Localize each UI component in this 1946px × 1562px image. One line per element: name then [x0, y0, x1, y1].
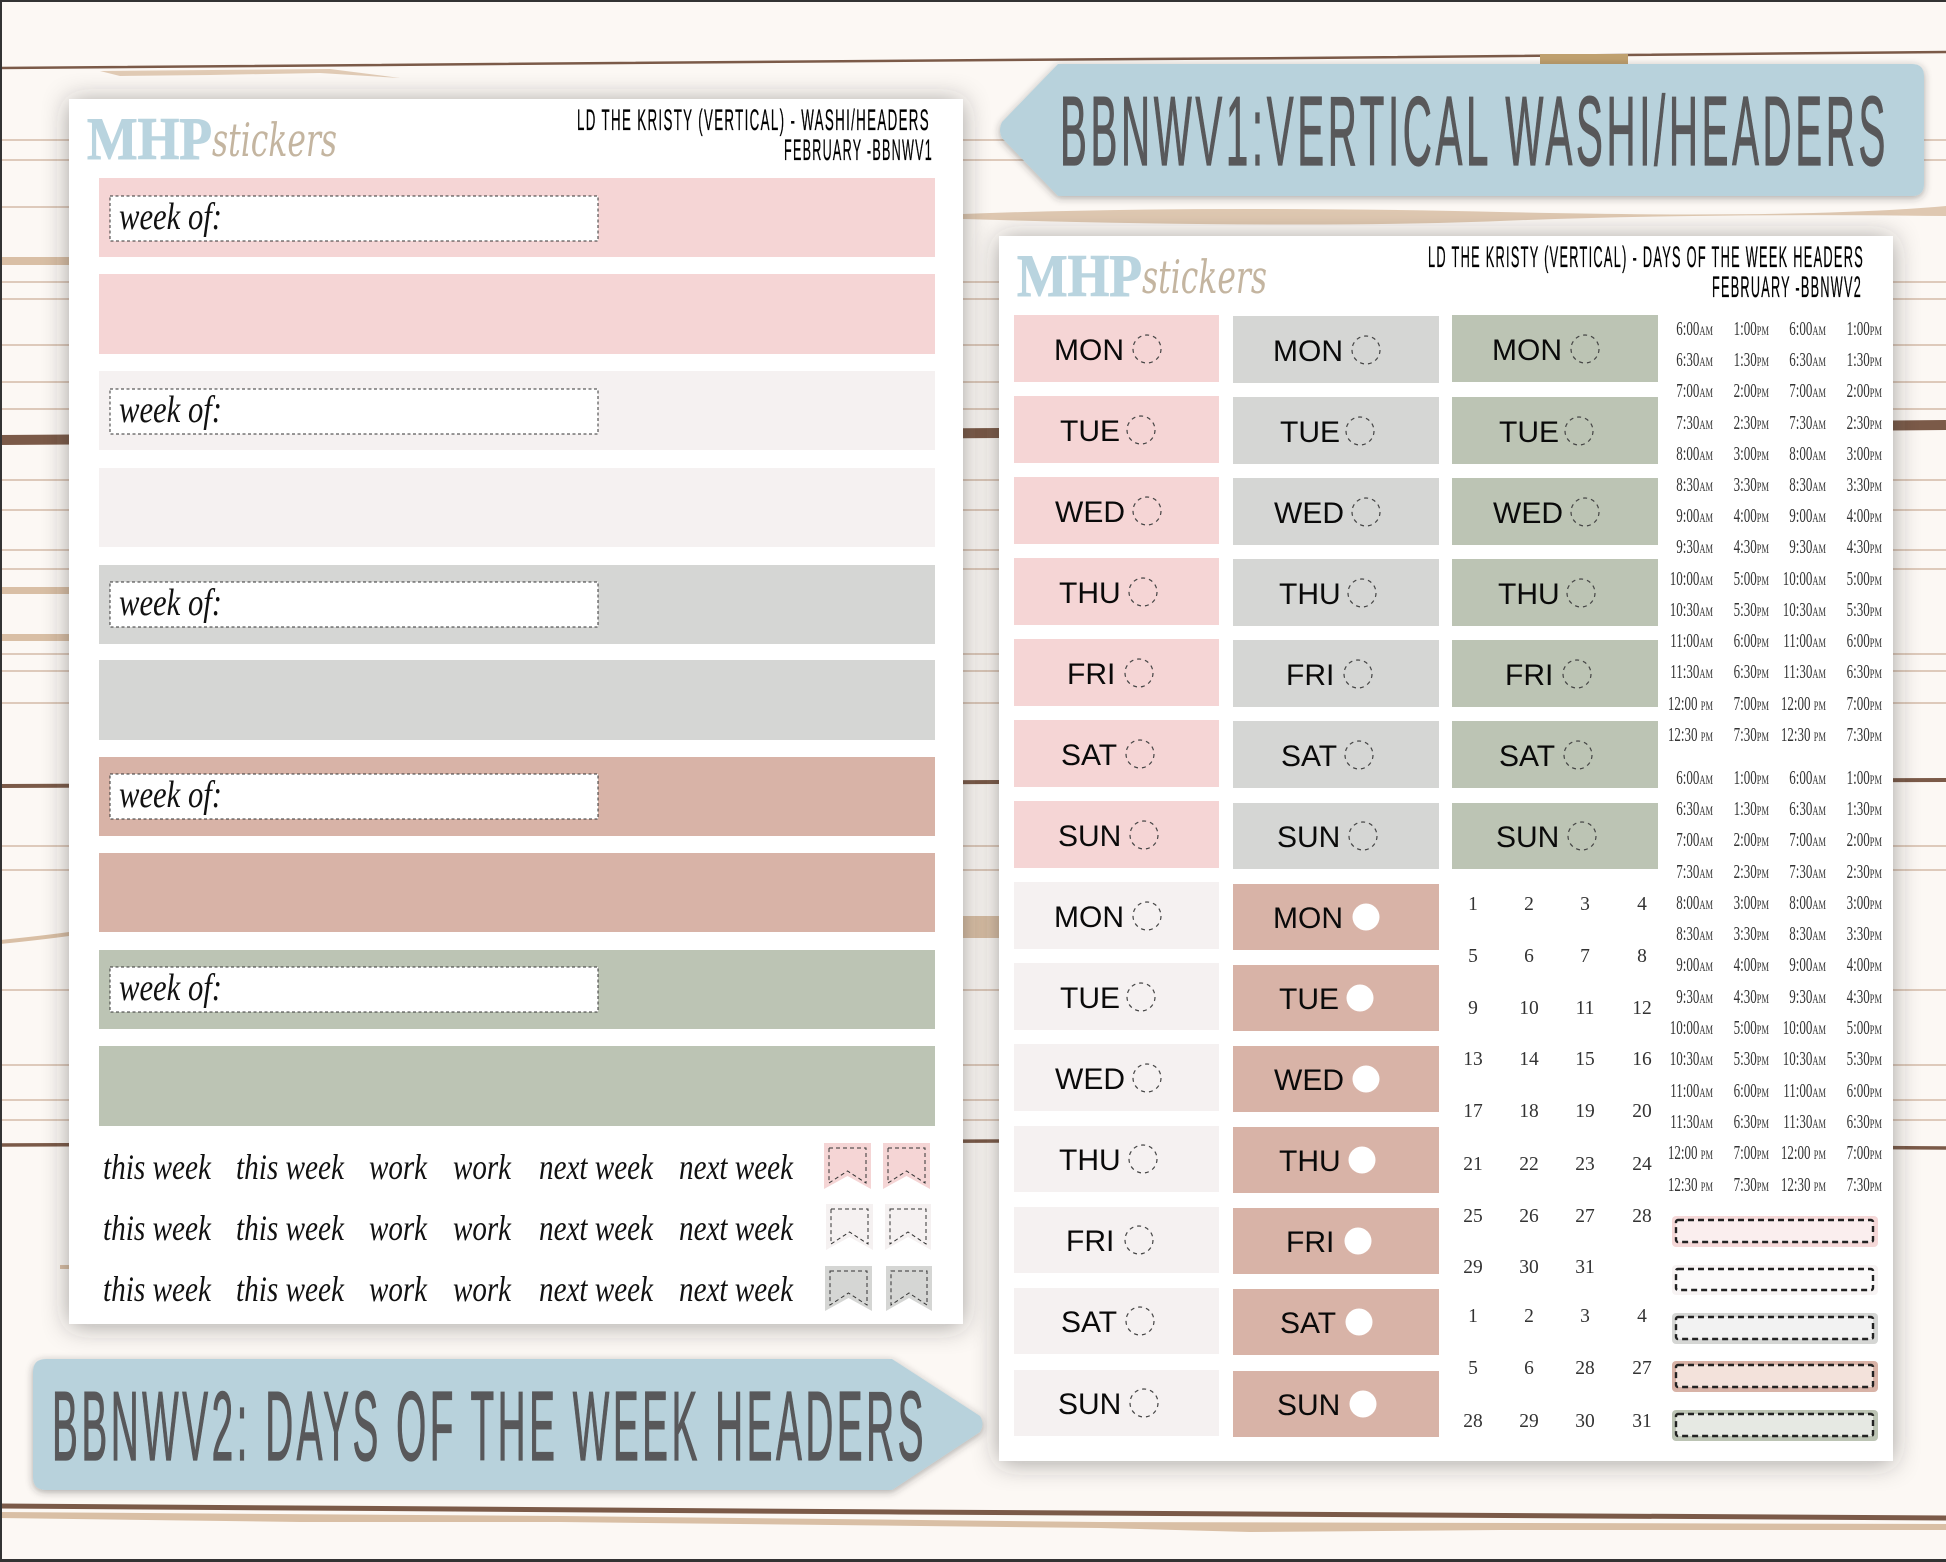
date number stickers: 1: [1468, 1306, 1478, 1327]
script words row 3: this week: [103, 1269, 212, 1309]
logo: [1017, 243, 1267, 309]
time stickers: upper block: 7:30PM: [1734, 723, 1769, 746]
time stickers: upper block: 1:30PM: [1847, 348, 1882, 371]
time stickers: upper block: 7:30PM: [1847, 723, 1882, 746]
time stickers: lower block: 7:30PM: [1847, 1173, 1882, 1196]
time stickers: lower block: 2:00PM: [1847, 828, 1882, 851]
time stickers: upper block: 6:30PM: [1847, 660, 1882, 683]
time stickers: lower block: 12:00 PM: [1668, 1141, 1713, 1164]
time stickers: upper block: 3:00PM: [1734, 442, 1769, 465]
script words row 2: [103, 1208, 794, 1248]
date number stickers: 17: [1463, 1101, 1483, 1122]
time stickers: upper block: 2:00PM: [1847, 379, 1882, 402]
column: blush day headers: WED: [1055, 1063, 1125, 1096]
time stickers: upper block: 9:30AM: [1676, 535, 1713, 558]
time stickers: lower block: 6:30PM: [1734, 1110, 1769, 1133]
date number stickers: 2: [1524, 894, 1534, 915]
strip: grey: [99, 660, 935, 740]
script words row 3: work: [453, 1269, 512, 1309]
logo: stickers: [212, 113, 337, 167]
column: blush day headers: TUE: [1060, 982, 1120, 1015]
time stickers: lower block: 10:00AM: [1670, 1016, 1713, 1039]
infographic canvas: LD THE KRISTY (VERTICAL) - WASHI/HEADERS: [577, 104, 930, 137]
time stickers: upper block: 9:00AM: [1789, 504, 1826, 527]
time stickers: lower block: 3:30PM: [1847, 922, 1882, 945]
time stickers: upper block: 3:30PM: [1847, 473, 1882, 496]
date number stickers: 1: [1468, 894, 1478, 915]
time stickers: upper block: 7:30AM: [1789, 411, 1826, 434]
time stickers: lower block: 7:30AM: [1676, 860, 1713, 883]
time stickers: lower block: 9:30AM: [1789, 985, 1826, 1008]
time stickers: lower block: 10:30AM: [1670, 1047, 1713, 1070]
script words row 1: work: [453, 1147, 512, 1187]
time stickers: upper block: 12:00 PM: [1668, 692, 1713, 715]
script words row 1: this week: [236, 1147, 345, 1187]
time stickers: upper block: 9:30AM: [1789, 535, 1826, 558]
dashed label strip: sage: [1672, 1410, 1878, 1441]
script words row 1: next week: [679, 1147, 794, 1187]
time stickers: lower block: 9:00AM: [1789, 953, 1826, 976]
time stickers: upper block: 11:00AM: [1670, 629, 1713, 652]
time stickers: upper block: 3:30PM: [1734, 473, 1769, 496]
column: grey day headers: TUE: [1280, 416, 1340, 449]
time stickers: lower block: 2:30PM: [1734, 860, 1769, 883]
time stickers: lower block: 2:00PM: [1734, 828, 1769, 851]
time stickers: lower block: 7:30PM: [1734, 1173, 1769, 1196]
column: blush day headers: [1014, 882, 1219, 1436]
time stickers: lower block: 3:30PM: [1734, 922, 1769, 945]
column: pink day headers: SUN: [1058, 820, 1121, 853]
script words row 1: work: [369, 1147, 428, 1187]
time stickers: upper block: 7:00PM: [1734, 692, 1769, 715]
strip: rose with week of label: week of:: [119, 774, 222, 816]
column: grey day headers: THU: [1279, 578, 1341, 611]
time stickers: lower block: 1:30PM: [1734, 797, 1769, 820]
strip: grey with week of label: [99, 565, 935, 644]
date number stickers: 3: [1580, 894, 1590, 915]
time stickers: lower block: 11:30AM: [1670, 1110, 1713, 1133]
date number stickers: 24: [1632, 1154, 1652, 1175]
time stickers: upper block: 2:00PM: [1734, 379, 1769, 402]
time stickers: lower block: 4:00PM: [1847, 953, 1882, 976]
icon: grey flag stickers: [825, 1266, 932, 1311]
date number stickers: 18: [1519, 1101, 1539, 1122]
dashed label strip: pink: [1672, 1216, 1878, 1247]
date number stickers: 12: [1632, 998, 1652, 1019]
date number stickers: 9: [1468, 998, 1478, 1019]
column: sage day headers: FRI: [1505, 659, 1553, 692]
column: blush day headers: SUN: [1058, 1388, 1121, 1421]
time stickers: lower block: 12:30 PM: [1668, 1173, 1713, 1196]
column: grey day headers: MON: [1273, 335, 1343, 368]
time stickers: upper block: 8:30AM: [1789, 473, 1826, 496]
column: grey day headers: WED: [1274, 497, 1344, 530]
time stickers: upper block: 7:00AM: [1676, 379, 1713, 402]
date number stickers: 4: [1637, 894, 1647, 915]
time stickers: lower block: 6:00AM: [1676, 766, 1713, 789]
time stickers: upper block: 8:30AM: [1676, 473, 1713, 496]
column: pink day headers: TUE: [1060, 415, 1120, 448]
time stickers: lower block: 5:30PM: [1734, 1047, 1769, 1070]
time stickers: upper block: 2:30PM: [1734, 411, 1769, 434]
column: rose day headers: TUE: [1279, 983, 1339, 1016]
time stickers: lower block: 3:00PM: [1734, 891, 1769, 914]
date number stickers: 25: [1463, 1206, 1483, 1227]
banner: BBNWV2 days of the week headers: [33, 1359, 982, 1490]
date number stickers: 21: [1463, 1154, 1483, 1175]
column: rose day headers: SAT: [1280, 1307, 1336, 1340]
time stickers: lower block: 1:00PM: [1847, 766, 1882, 789]
date number stickers: 8: [1637, 946, 1647, 967]
script words row 3: [103, 1269, 794, 1309]
date number stickers: 26: [1519, 1206, 1539, 1227]
strip: rose with week of label: [99, 757, 935, 836]
time stickers: upper block: 7:00AM: [1789, 379, 1826, 402]
time stickers: lower block: 5:00PM: [1734, 1016, 1769, 1039]
time stickers: upper block: 6:00AM: [1789, 317, 1826, 340]
strip: sage with week of label: week of:: [119, 967, 222, 1009]
panel: washi / headers sticker sheet: [69, 99, 963, 1324]
dashed label strip: rose: [1672, 1361, 1878, 1392]
time stickers: lower block: 6:30AM: [1789, 797, 1826, 820]
script words row 3: next week: [679, 1269, 794, 1309]
date number stickers: 15: [1575, 1049, 1595, 1070]
time stickers: lower block: 7:00AM: [1676, 828, 1713, 851]
date number stickers: 5: [1468, 1358, 1478, 1379]
time stickers: lower block: 10:30AM: [1783, 1047, 1826, 1070]
time stickers: upper block: 12:30 PM: [1781, 723, 1826, 746]
time stickers: lower block: 11:30AM: [1783, 1110, 1826, 1133]
column: pink day headers: MON: [1054, 334, 1124, 367]
column: grey day headers: SUN: [1277, 821, 1340, 854]
date number stickers: 6: [1524, 1358, 1534, 1379]
script words row 1: this week: [103, 1147, 212, 1187]
date number stickers: 22: [1519, 1154, 1539, 1175]
strip: pink: [99, 274, 935, 354]
script words row 2: this week: [236, 1208, 345, 1248]
date number stickers: 28: [1463, 1411, 1483, 1432]
script words row 3: next week: [539, 1269, 654, 1309]
script words row 3: this week: [236, 1269, 345, 1309]
time stickers: lower block: 8:30AM: [1676, 922, 1713, 945]
time stickers: lower block: 4:00PM: [1734, 953, 1769, 976]
strip: pink with week of label: [99, 178, 935, 257]
column: grey day headers: [1233, 316, 1439, 869]
banner: BBNWV1 vertical washi/headers: [1000, 64, 1924, 196]
time stickers: upper block: 12:30 PM: [1668, 723, 1713, 746]
strip: blush: [99, 468, 935, 547]
time stickers: upper block: 10:00AM: [1783, 567, 1826, 590]
script words row 2: next week: [539, 1208, 654, 1248]
date number stickers: 14: [1519, 1049, 1539, 1070]
date number stickers: 16: [1632, 1049, 1652, 1070]
sheet title: [1428, 241, 1864, 304]
column: pink day headers: WED: [1055, 496, 1125, 529]
column: grey day headers: SAT: [1281, 740, 1337, 773]
time stickers: lower block: 4:30PM: [1847, 985, 1882, 1008]
date number stickers: 30: [1575, 1411, 1595, 1432]
date number stickers: 27: [1632, 1358, 1652, 1379]
time stickers: upper block: 9:00AM: [1676, 504, 1713, 527]
strip: rose: [99, 853, 935, 932]
time stickers: upper block: 1:00PM: [1734, 317, 1769, 340]
date number stickers: 3: [1580, 1306, 1590, 1327]
date number stickers: 29: [1519, 1411, 1539, 1432]
time stickers: lower block: 4:30PM: [1734, 985, 1769, 1008]
logo: MHP: [1017, 243, 1142, 309]
date number stickers: 27: [1575, 1206, 1595, 1227]
date number stickers: 5: [1468, 946, 1478, 967]
time stickers: upper block: 7:30AM: [1676, 411, 1713, 434]
script words row 2: work: [453, 1208, 512, 1248]
time stickers: lower block: 6:00PM: [1847, 1079, 1882, 1102]
time stickers: lower block: 1:30PM: [1847, 797, 1882, 820]
time stickers: upper block: 7:00PM: [1847, 692, 1882, 715]
script words row 3: work: [369, 1269, 428, 1309]
strip: sage with week of label: [99, 950, 935, 1029]
time stickers: upper block: [1668, 317, 1882, 746]
time stickers: lower block: 1:00PM: [1734, 766, 1769, 789]
logo: MHP: [87, 106, 212, 172]
date number stickers: 23: [1575, 1154, 1595, 1175]
time stickers: lower block: 11:00AM: [1783, 1079, 1826, 1102]
date number stickers: 31: [1575, 1257, 1595, 1278]
strip: grey with week of label: week of:: [119, 582, 222, 624]
time stickers: upper block: 6:00AM: [1676, 317, 1713, 340]
time stickers: lower block: 5:00PM: [1847, 1016, 1882, 1039]
column: sage day headers: MON: [1492, 334, 1562, 367]
column: sage day headers: TUE: [1499, 416, 1559, 449]
time stickers: upper block: 12:00 PM: [1781, 692, 1826, 715]
time stickers: lower block: 11:00AM: [1670, 1079, 1713, 1102]
time stickers: lower block: 6:00AM: [1789, 766, 1826, 789]
time stickers: upper block: 11:30AM: [1783, 660, 1826, 683]
time stickers: upper block: 5:00PM: [1847, 567, 1882, 590]
time stickers: upper block: 6:30PM: [1734, 660, 1769, 683]
time stickers: lower block: 9:00AM: [1676, 953, 1713, 976]
column: rose day headers: [1233, 884, 1439, 1437]
time stickers: upper block: 5:30PM: [1734, 598, 1769, 621]
date number stickers: 2: [1524, 1306, 1534, 1327]
column: sage day headers: WED: [1493, 497, 1563, 530]
date number stickers: 6: [1524, 946, 1534, 967]
date number stickers: 10: [1519, 998, 1539, 1019]
time stickers: lower block: 9:30AM: [1676, 985, 1713, 1008]
script words row 2: this week: [103, 1208, 212, 1248]
strip: blush with week of label: week of:: [119, 389, 222, 431]
time stickers: lower block: 10:00AM: [1783, 1016, 1826, 1039]
time stickers: upper block: 1:00PM: [1847, 317, 1882, 340]
time stickers: lower block: 7:00AM: [1789, 828, 1826, 851]
column: sage day headers: SAT: [1499, 740, 1555, 773]
time stickers: lower block: 7:00PM: [1847, 1141, 1882, 1164]
date number stickers: 11: [1576, 998, 1594, 1019]
column: pink day headers: [1014, 315, 1219, 868]
time stickers: upper block: 11:30AM: [1670, 660, 1713, 683]
time stickers: lower block: 6:30PM: [1847, 1110, 1882, 1133]
column: sage day headers: THU: [1498, 578, 1560, 611]
column: rose day headers: THU: [1279, 1145, 1341, 1178]
time stickers: upper block: 6:30AM: [1789, 348, 1826, 371]
column: pink day headers: SAT: [1061, 739, 1117, 772]
date number stickers: 19: [1575, 1101, 1595, 1122]
column: rose day headers: WED: [1274, 1064, 1344, 1097]
script words row 2: next week: [679, 1208, 794, 1248]
time stickers: upper block: 5:00PM: [1734, 567, 1769, 590]
strip: sage: [99, 1046, 935, 1126]
time stickers: lower block: 7:30AM: [1789, 860, 1826, 883]
time stickers: upper block: 10:00AM: [1670, 567, 1713, 590]
time stickers: lower block: 8:00AM: [1676, 891, 1713, 914]
time stickers: lower block: 6:00PM: [1734, 1079, 1769, 1102]
time stickers: upper block: 8:00AM: [1676, 442, 1713, 465]
strip: pink with week of label: week of:: [119, 196, 222, 238]
column: pink day headers: FRI: [1067, 658, 1115, 691]
time stickers: upper block: 4:00PM: [1847, 504, 1882, 527]
time stickers: lower block: 8:30AM: [1789, 922, 1826, 945]
column: blush day headers: MON: [1054, 901, 1124, 934]
dashed label strip: blush: [1672, 1265, 1878, 1295]
date number stickers: 28: [1575, 1358, 1595, 1379]
time stickers: lower block: 7:00PM: [1734, 1141, 1769, 1164]
time stickers: upper block: 4:30PM: [1734, 535, 1769, 558]
date number stickers: 13: [1463, 1049, 1483, 1070]
time stickers: lower block: 12:30 PM: [1781, 1173, 1826, 1196]
date number stickers: 29: [1463, 1257, 1483, 1278]
time stickers: upper block: 6:00PM: [1734, 629, 1769, 652]
column: sage day headers: SUN: [1496, 821, 1559, 854]
time stickers: lower block: 2:30PM: [1847, 860, 1882, 883]
panel: days of the week sticker sheet: [999, 236, 1893, 1461]
time stickers: upper block: 4:00PM: [1734, 504, 1769, 527]
date number stickers: 20: [1632, 1101, 1652, 1122]
column: rose day headers: FRI: [1286, 1226, 1334, 1259]
time stickers: lower block: 6:30AM: [1676, 797, 1713, 820]
strip: blush with week of label: [99, 371, 935, 450]
time stickers: upper block: 6:00PM: [1847, 629, 1882, 652]
time stickers: upper block: 10:30AM: [1783, 598, 1826, 621]
column: blush day headers: THU: [1059, 1144, 1121, 1177]
time stickers: lower block: [1668, 766, 1882, 1196]
dashed label strip: grey: [1672, 1313, 1878, 1344]
time stickers: upper block: 6:30AM: [1676, 348, 1713, 371]
panel: washi / headers sticker sheet: FEBRUARY -BBNWV1: [784, 134, 933, 167]
icon: blush flag stickers: [826, 1204, 931, 1250]
column: rose day headers: MON: [1273, 902, 1343, 935]
time stickers: upper block: 3:00PM: [1847, 442, 1882, 465]
date number stickers: [1463, 894, 1652, 1432]
script words row 1: next week: [539, 1147, 654, 1187]
column: grey day headers: FRI: [1286, 659, 1334, 692]
time stickers: upper block: 1:30PM: [1734, 348, 1769, 371]
time stickers: lower block: 12:00 PM: [1781, 1141, 1826, 1164]
time stickers: upper block: 10:30AM: [1670, 598, 1713, 621]
logo: stickers: [1142, 250, 1267, 304]
time stickers: upper block: 4:30PM: [1847, 535, 1882, 558]
column: sage day headers: [1452, 315, 1658, 869]
script words row 2: work: [369, 1208, 428, 1248]
time stickers: upper block: 5:30PM: [1847, 598, 1882, 621]
icon: pink flag stickers: [824, 1143, 930, 1189]
date number stickers: 7: [1580, 946, 1590, 967]
date number stickers: 4: [1637, 1306, 1647, 1327]
time stickers: upper block: 2:30PM: [1847, 411, 1882, 434]
time stickers: upper block: 8:00AM: [1789, 442, 1826, 465]
date number stickers: 30: [1519, 1257, 1539, 1278]
column: rose day headers: SUN: [1277, 1389, 1340, 1422]
time stickers: upper block: 11:00AM: [1783, 629, 1826, 652]
script words row 1: [103, 1147, 794, 1187]
time stickers: lower block: 5:30PM: [1847, 1047, 1882, 1070]
column: blush day headers: SAT: [1061, 1306, 1117, 1339]
time stickers: lower block: 8:00AM: [1789, 891, 1826, 914]
time stickers: lower block: 3:00PM: [1847, 891, 1882, 914]
column: pink day headers: THU: [1059, 577, 1121, 610]
sheet title: [577, 104, 933, 167]
date number stickers: 31: [1632, 1411, 1652, 1432]
logo: [87, 106, 337, 172]
date number stickers: 28: [1632, 1206, 1652, 1227]
column: blush day headers: FRI: [1066, 1225, 1114, 1258]
